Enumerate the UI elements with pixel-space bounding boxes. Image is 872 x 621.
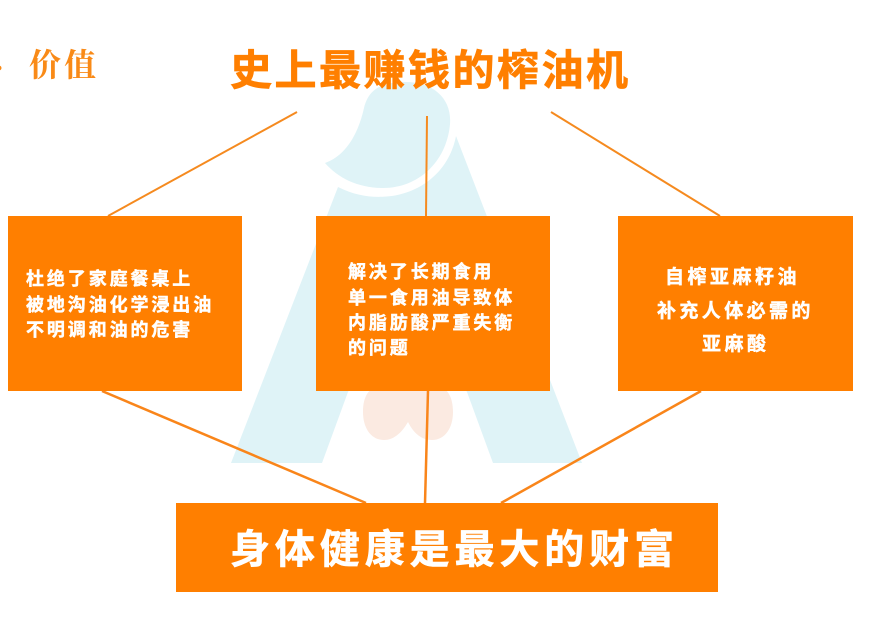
text line: 内脂肪酸严重失衡 [348,313,515,333]
figure head [325,82,450,188]
text line: 补充人体必需的 [657,301,814,322]
text line: 解决了长期食用 [348,262,494,282]
panel: linolenic acid [618,216,853,391]
cropped label mark [0,66,2,70]
text line: 单一食用油导致体 [348,288,515,308]
lower connector lines [102,391,701,503]
text line: 不明调和油的危害 [26,320,193,340]
text line: 杜绝了家庭餐桌上 [26,269,193,289]
section label: 价值 [29,47,99,83]
text line: 亚麻酸 [702,334,770,355]
panel: bottom banner [176,503,718,592]
panel: fatty acid imbalance [316,216,550,391]
figure body [231,136,582,463]
text line: 自榨亚麻籽油 [665,267,800,288]
text line: 的问题 [348,338,411,358]
panel: household risks [8,216,242,391]
heart shape [363,385,453,440]
text line: 被地沟油化学浸出油 [26,295,214,315]
connector lines [108,112,720,216]
banner text: 身体健康是最大的财富 [230,528,679,572]
title: 史上最赚钱的榨油机 [230,47,631,94]
